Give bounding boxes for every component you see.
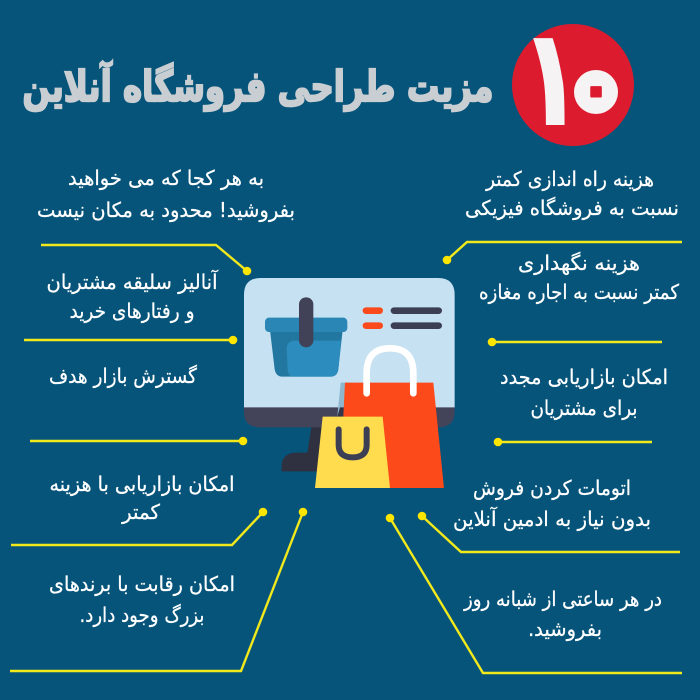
- text block: competing with big brands: امکان رقابت با برندهای: [49, 572, 235, 596]
- text block: low cost marketing: [50, 472, 234, 524]
- basket: [265, 297, 347, 377]
- text block: remarketing: [500, 365, 668, 420]
- monitor screen: [244, 278, 455, 407]
- text block: sell anywhere: [37, 166, 295, 222]
- badge: number 10: ۱: [518, 0, 584, 158]
- text block: sales automation: اتومات کردن فروش: [473, 476, 631, 500]
- text block: sell anywhere: به هر کجا که می خواهید: [68, 166, 264, 190]
- text block: competing with big brands: بزرگ وجود دارد.: [80, 603, 204, 627]
- text block: sell anywhere: بفروشید! محدود به مکان نیست: [37, 198, 295, 222]
- connector: fifth right: [386, 514, 682, 673]
- text block: remarketing: برای مشتریان: [530, 396, 638, 420]
- text block: customer taste analysis: و رفتارهای خرید: [70, 299, 194, 323]
- list lines on screen: [363, 307, 442, 329]
- text block: competing with big brands: [49, 572, 235, 627]
- text block: sales automation: [453, 476, 651, 531]
- text block: lower setup cost: [465, 167, 679, 220]
- connector: second left: [24, 336, 237, 344]
- title: مزیت طراحی فروشگاه آنلاین: [22, 61, 494, 112]
- text block: lower maintenance cost: هزینه نگهداری: [518, 251, 640, 275]
- connector: second right: [488, 338, 662, 346]
- connector: fifth left: [10, 508, 307, 671]
- connector: fourth right: [418, 512, 680, 552]
- connector: top left: [41, 245, 251, 275]
- text block: sell any hour: [463, 587, 662, 641]
- text block: low cost marketing: کمتر: [121, 500, 160, 524]
- connector: third left: [30, 437, 247, 445]
- text block: sell any hour: در هر ساعتی از شبانه روز: [463, 587, 662, 611]
- connector: fourth left: [11, 508, 267, 545]
- text block: lower maintenance cost: [479, 251, 679, 304]
- text block: lower maintenance cost: کمتر نسبت به اجاره مغازه: [479, 280, 679, 304]
- text block: target market: گسترش بازار هدف: [49, 364, 197, 388]
- text block: sales automation: بدون نیاز به ادمین آنلاین: [453, 506, 651, 531]
- text block: lower setup cost: نسبت به فروشگاه فیزیکی: [465, 196, 679, 220]
- text block: remarketing: امکان بازاریابی مجدد: [500, 365, 668, 389]
- monitor base: [244, 407, 455, 427]
- illustration: monitor with basket and shopping bags: [244, 278, 455, 488]
- badge: number 10: ۰: [579, 56, 613, 120]
- red shopping bag: [337, 348, 444, 488]
- monitor stand: [282, 425, 325, 471]
- text block: lower setup cost: هزینه راه اندازی کمتر: [485, 167, 654, 191]
- badge: number 10: [512, 0, 634, 158]
- text block: sell any hour: بفروشید.: [528, 617, 602, 641]
- text block: customer taste analysis: آنالیز سلیقه مشتریان: [46, 269, 219, 294]
- connector: top right: [443, 242, 682, 264]
- connector: third right: [494, 438, 652, 446]
- yellow shopping bag: [315, 417, 390, 488]
- text block: customer taste analysis: [46, 269, 219, 323]
- text block: low cost marketing: امکان بازاریابی با هزینه: [50, 472, 234, 496]
